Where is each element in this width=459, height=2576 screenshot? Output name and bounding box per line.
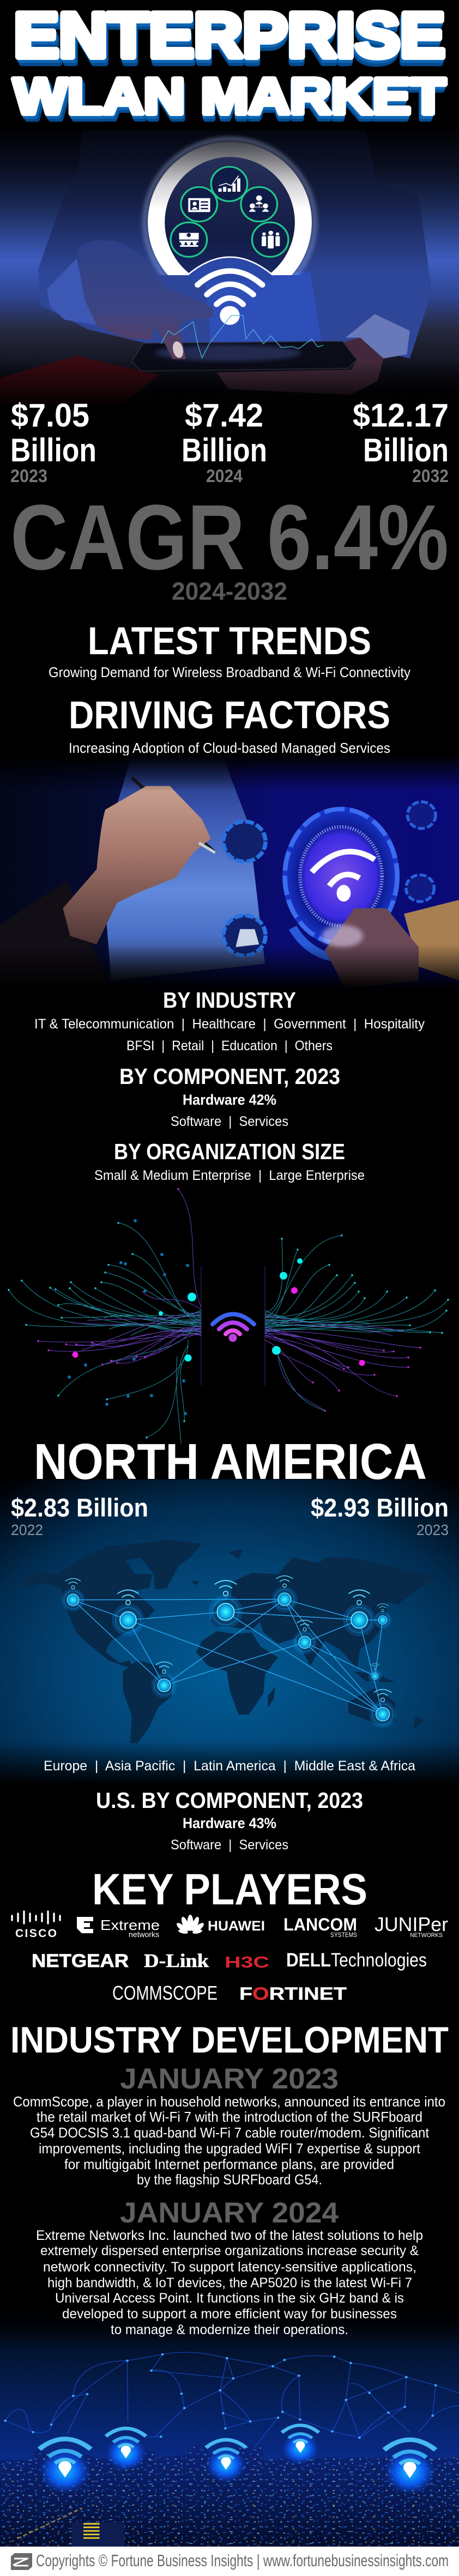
logo: extreme networks: Extreme (100, 1917, 160, 1933)
other regions: Europe | Asia Pacific | Latin America | Middle East & Africa (44, 1758, 415, 1774)
value 2024: 2024 (206, 466, 243, 486)
value 2024: Billion (182, 432, 267, 468)
logo: netgear: NETGEAR (32, 1951, 129, 1971)
icon: bar chart (219, 175, 240, 192)
line end dots (9, 1223, 448, 1438)
network connections (5, 2352, 459, 2447)
title: WLAN MARKET (15, 71, 444, 127)
january 2024: developed to support a more efficient way for businesses (62, 2306, 397, 2322)
january 2024: to manage & modernize their operations. (111, 2322, 348, 2337)
logo: juniper: JUNIPer (375, 1913, 448, 1935)
U.S. by component (96, 1788, 363, 1853)
teal lines (9, 1223, 201, 1444)
world map panel (0, 1479, 459, 1785)
line chart overlay (161, 315, 323, 358)
logo: d-link: D-Link (144, 1950, 209, 1971)
logo: dell technologies (286, 1950, 427, 1971)
by industry (34, 988, 425, 1053)
logo: commscope: COMMSCOPE (112, 1982, 218, 2004)
north america values: $2.93 Billion (311, 1493, 449, 1522)
network links (73, 1599, 383, 1714)
value 2023: 2023 (10, 466, 47, 486)
january 2024 (36, 2197, 423, 2337)
driving factors: Increasing Adoption of Cloud-based Managed Services (69, 740, 390, 756)
by component: Hardware 42% (183, 1092, 276, 1108)
by component: Software | Services (171, 1114, 288, 1129)
icon: central wifi (213, 1314, 254, 1340)
latest trends: Growing Demand for Wireless Broadband & Wi-Fi Connectivity (49, 664, 410, 680)
january 2023: G54 DOCSIS 3.1 quad-band Wi-Fi 7 cable router/modem. Significant (30, 2124, 430, 2141)
icon: team (262, 230, 280, 248)
green icon circles (171, 167, 288, 257)
wifi nodes (62, 1576, 396, 1728)
title: ENTERPRISE (17, 6, 443, 77)
market size values (10, 397, 449, 486)
by component: BY COMPONENT, 2023 (119, 1064, 340, 1089)
value 2032: 2032 (412, 466, 449, 486)
by industry: BY INDUSTRY (163, 988, 296, 1013)
hologram (282, 807, 400, 958)
value 2032: $12.17 (353, 397, 449, 434)
logo: cisco (12, 1911, 60, 1940)
wifi pins (39, 2425, 436, 2494)
logo: cisco: CISCO (15, 1927, 57, 1940)
january 2023: the retail market of Wi-Fi 7 with the introduction of the SURFboard (37, 2109, 422, 2125)
city network image (0, 2305, 459, 2547)
by industry: IT & Telecommunication | Healthcare | Government | Hospitality (34, 1016, 425, 1032)
logo: lancom: SYSTEMS (330, 1931, 357, 1939)
latest trends: LATEST TRENDS (88, 620, 371, 663)
U.S. by component: U.S. BY COMPONENT, 2023 (96, 1788, 363, 1813)
title: ENTERPRISE (16, 3, 444, 74)
footer logo (11, 2553, 32, 2570)
logo: h3c: H3C (225, 1954, 269, 1971)
U.S. by component: Software | Services (171, 1837, 288, 1853)
icon: presentation (179, 233, 199, 247)
glowing blue particles (69, 1221, 188, 1414)
driving factors: DRIVING FACTORS (69, 694, 390, 737)
icon: id card (188, 198, 210, 212)
large glowing dots (159, 1258, 303, 1362)
value 2023 (10, 397, 96, 486)
driving factors (69, 694, 390, 756)
image: hand with pen and wifi hologram (0, 756, 459, 989)
title: ENTERPRISE (14, 0, 445, 71)
logo: huawei (176, 1915, 265, 1934)
value 2024: $7.42 (185, 397, 263, 434)
north america values: $2.83 Billion (11, 1493, 148, 1522)
title: WLAN MARKET (13, 68, 446, 124)
january 2024: extremely dispersed enterprise organizations increase security & (40, 2243, 419, 2258)
north america values: 2022 (11, 1521, 43, 1538)
logo: fortinet: FORTINET (239, 1984, 347, 2003)
logo: juniper: NETWORKS (410, 1932, 443, 1939)
icon: wifi signal (197, 271, 262, 305)
by organization size: Small & Medium Enterprise | Large Enterprise (94, 1168, 365, 1183)
latest trends (49, 620, 410, 680)
hologram ring (141, 134, 319, 276)
by organization size (94, 1139, 365, 1183)
value 2024 (182, 397, 267, 486)
january 2023 (13, 2063, 445, 2188)
value 2023: Billion (10, 432, 96, 468)
title: WLAN MARKET (17, 74, 443, 130)
CAGR: 2024-2032 (172, 577, 287, 605)
logo: extreme networks (77, 1917, 160, 1939)
january 2024: JANUARY 2024 (120, 2197, 339, 2229)
key player logos (12, 1911, 448, 2004)
icon: org chart (249, 196, 269, 212)
network nodes (5, 2354, 436, 2438)
by organization size: BY ORGANIZATION SIZE (114, 1139, 345, 1164)
north america values: 2023 (416, 1521, 449, 1538)
logo: dell technologies: Technologies (331, 1950, 427, 1971)
U.S. by component: Hardware 43% (183, 1815, 276, 1831)
january 2024: Universal Access Point. It functions in the six GHz band & is (55, 2291, 404, 2306)
logo: lancom: LANCOM (283, 1915, 357, 1934)
network graphic with wifi (9, 1189, 448, 1444)
key players heading: KEY PLAYERS (92, 1865, 367, 1914)
january 2023: JANUARY 2023 (120, 2063, 339, 2095)
january 2024: Extreme Networks Inc. launched two of the latest solutions to help (36, 2228, 423, 2243)
by industry: BFSI | Retail | Education | Others (126, 1038, 333, 1053)
logo: huawei: HUAWEI (208, 1919, 265, 1934)
logo: dell technologies: DELL (286, 1950, 331, 1971)
world map continents (22, 1539, 436, 1743)
january 2023: for multigigabit Internet performance plans, are provided (64, 2156, 394, 2172)
north america values (11, 1493, 449, 1538)
january 2024: network connectivity. To support latency-sensitive applications, (43, 2260, 416, 2275)
value 2023: $7.05 (11, 397, 89, 434)
logo: extreme networks: networks (129, 1930, 159, 1939)
icon: wifi arcs (312, 851, 375, 886)
hero image: hand touching tablet with wifi hologram (0, 125, 459, 409)
north america heading: NORTH AMERICA (34, 1433, 427, 1490)
january 2023: by the flagship SURFboard G54. (137, 2171, 322, 2188)
january 2024: high bandwidth, & IoT devices, the AP5020 is the latest Wi-Fi 7 (47, 2275, 412, 2291)
january 2023: improvements, including the upgraded WiFI 7 expertise & support (39, 2140, 421, 2157)
title (13, 0, 446, 130)
value 2032 (353, 397, 449, 486)
footer (0, 2547, 459, 2576)
by component (119, 1064, 340, 1129)
